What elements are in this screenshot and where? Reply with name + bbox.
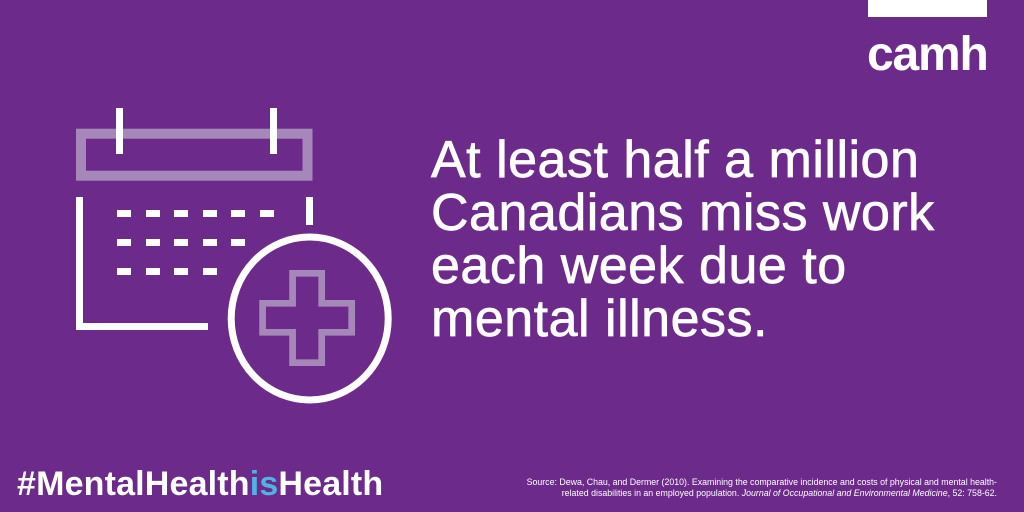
source citation: Source: Dewa, Chau, and Dermer (2010). Examining the comparative incidence and costs of physical and mental health- (527, 477, 997, 487)
main statement: At least half a million (431, 130, 919, 188)
main statement (430, 130, 935, 348)
hashtag: #MentalHealthisHealth (17, 465, 383, 503)
main statement: mental illness. (431, 290, 768, 348)
calendar header bar (81, 134, 308, 176)
logo: camh: camh (867, 28, 988, 81)
logo bar (868, 0, 987, 17)
medical circle (231, 237, 388, 400)
main statement: Canadians miss work (431, 184, 935, 242)
source citation: related disabilities in an employed population. Journal of Occupational and Environmental Medicine, 52: 758-62. (562, 488, 997, 498)
calendar date dashes (117, 210, 274, 275)
calendar binding pins (116, 108, 277, 154)
medical cross (263, 273, 352, 363)
calendar body outline (76, 197, 313, 330)
source citation (527, 477, 997, 498)
main statement: each week due to (431, 236, 847, 294)
